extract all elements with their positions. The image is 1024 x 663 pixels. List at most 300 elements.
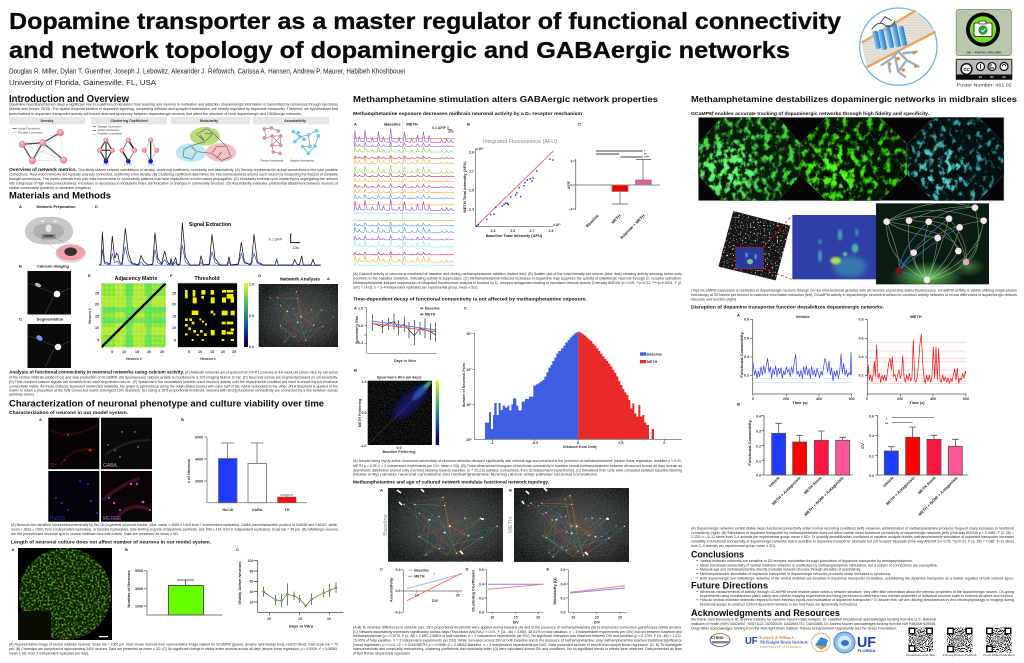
- panel E: adjacency matrix: Neuron #: [126, 357, 142, 361]
- panel C: assortativity lines: 20: [456, 594, 460, 598]
- panel: introduction and overview: [9, 94, 338, 190]
- panel C: delta F/F bar chart: -4: [569, 208, 572, 212]
- panel B: neuron number bar: 5000: [135, 569, 143, 573]
- caption: topology: (A,B) To minimize differences in network size, 15% proportional thresholds were applied during baseline (A) and in the presence of methamphetamine (B) to emphasize connection gains/losses (white arrows).: [353, 626, 682, 630]
- caption: topology: of best fit from simple linear regression.: [353, 652, 411, 656]
- clustering coefficient diagrams: C = 1/3: [124, 164, 133, 166]
- caption: decay: [353, 459, 682, 477]
- heading: middle column: Methamphetamine stimulation alters GABAergic network properties: [353, 94, 658, 104]
- caption: topology: methamphetamine (p = 0.1078, F (1, 46) = 2.690, 2.568% of total variation, n = 3 independent experiments per DIV). No significant interaction was observed between DIV and condition (p = 0.1750, F (11, 46) = 1.472,: [353, 634, 682, 638]
- panel B: CV bars: METH + NOMI + Antagonists: [917, 475, 959, 517]
- panel C: delta F/F bar chart: *: [644, 150, 646, 154]
- caption: GCaMP6f: microscopy at 30 frames per second to maximize information extraction (left). GCaMP6f activity in dopaminergic neurons is utilized to construct activity networks to reveal differences in dopaminergic network: [691, 293, 1017, 297]
- logo: CTRND: [710, 633, 730, 646]
- caption: topology: 15.45% of total variation, n = 3 independent experiments per DIV). While increases across DIV at both baseline and in the presence of methamphetamine, only methamphetamine reached statistical significance: [353, 638, 682, 642]
- panel B: neuron number bar: [125, 547, 222, 615]
- panel A: immunostaining images: TH: [50, 463, 57, 469]
- panel C: delta F/F bar chart: Baseline: [585, 213, 600, 228]
- panel A: METH connectivity trace: 0.6: [858, 336, 864, 340]
- badge: OK photo record: [956, 10, 1011, 56]
- acknowledgments text: Doug Miller acknowledges funding from the McKnight Brain Institute Trainee Enhancement Opportunity and the Gress Foundation.: [691, 626, 897, 630]
- caption: culture length: µm. (B) Coverslips are comprised of approximately 3400 neurons. Data are presented as mean ± SD. (C) No significant change in visibly active neurons across all days (simple linear regression, p = 0.0916, r² = 0.08365,: [9, 647, 338, 651]
- panel B: neuron number bar: 1000: [135, 604, 143, 608]
- panel C: distance from unity histogram: Baseline: [647, 352, 662, 356]
- colorbar: [244, 282, 254, 349]
- overview text block: connections. Real-world networks are typically sparsely connected, conferring a low density. (B) Clustering coefficient determines the interconnectedness around each neuron by measuring the fraction of complete: [9, 172, 338, 176]
- panel A: vehicle connectivity trace: 0: [752, 397, 754, 401]
- panel C: assortativity lines: Assortativity: [388, 577, 394, 602]
- methods caption: connectivity matrix. As these matrices represent undirected networks, the graph is symmetrical along the origin (black boxes) with each half of the matrix redundant to the other. (F) A threshold is applied to the: [9, 384, 338, 388]
- panel E: modularity lines: 0.2: [560, 596, 566, 600]
- panel C: assortativity lines: [380, 566, 462, 614]
- panel B: CV bars: 0.6: [869, 414, 874, 418]
- panel B: integrated fluorescence scatter: B: [467, 122, 470, 126]
- panel B: integrated fluorescence scatter: 2.9: [548, 229, 554, 233]
- panel F: threshold matrix: 10: [198, 350, 202, 354]
- panel D: clustering coefficient lines: 15: [514, 616, 518, 620]
- panel B: integrated fluorescence scatter: Baseline Total Intensity (AFU): [486, 233, 543, 238]
- heading: acknowledgments: Acknowledgments and Resources: [691, 607, 840, 618]
- panel A: METH connectivity trace: 200: [897, 397, 903, 401]
- panel E: adjacency matrix: 5: [111, 350, 113, 354]
- panel C: assortativity lines: C: [380, 566, 383, 572]
- panel F: threshold matrix: 5: [188, 350, 190, 354]
- panel D: clustering coefficient lines: 0.2: [479, 596, 484, 600]
- methods caption: matrix to retain a proportion of the fully connected matrix (strongest 15% depicted). (G) Using a 15% proportional threshold, neurons with strong functional connectivity are connected by a line between somas: [9, 389, 338, 393]
- panel G: network analysis image: G: [258, 273, 261, 278]
- panel C: active neurons line chart: 20: [327, 617, 331, 621]
- subheading: culture length: Length of neuronal culture does not affect number of neurons in our model system.: [11, 540, 211, 544]
- panel A: vehicle connectivity trace: 0.6: [744, 336, 749, 340]
- panel C: distance from unity histogram: 0.5: [618, 441, 624, 445]
- panel B: CV bars: *: [886, 416, 888, 422]
- caption: disruption: (A) Dopaminergic networks exhibit stable mean functional connectivity under normal recording conditions (left). However, administration of methamphetamine produces frequent sharp increases in functional: [691, 526, 1014, 530]
- panel B: CV bars: METH + Antagonists: [885, 475, 916, 506]
- methods caption: (arbitrary colors).: [9, 392, 35, 396]
- logo: CTRND: CTRND: [711, 636, 724, 640]
- badge: creative commons license: NC: [990, 75, 994, 79]
- assortativity diagram: Negative Assortativity: [290, 160, 315, 162]
- heading: right column: Methamphetamine destabilizes dopaminergic networks in midbrain slices: [691, 94, 1017, 104]
- panel B: functional connectivity bars: METH Alone: [803, 475, 823, 495]
- cropped imaging field: [718, 211, 792, 280]
- panel E: adjacency matrix: 20: [95, 302, 99, 306]
- methods caption: [9, 370, 338, 396]
- conclusions bullet list: Ventral midbrain networks are sensitive to D2 receptor modulation through stimulation of dopamine transporter by methamphetamine.: [700, 559, 913, 563]
- clustering coefficient diagrams: [93, 124, 159, 166]
- panel D: clustering coefficient lines: 20: [536, 616, 540, 620]
- panel C: assortativity lines: 0.3: [396, 568, 400, 572]
- heading: future directions: Future Directions: [691, 580, 768, 590]
- density diagram: Possible Connection: [18, 130, 43, 134]
- future directions bullet list: behavioral assays to construct context-dependent networks to see how these are dynamically restructured.: [700, 602, 858, 606]
- panel C: distance from unity histogram: 10¹: [466, 403, 472, 407]
- panel D: clustering coefficient lines: Clustering Coefficient: [470, 570, 476, 612]
- panel B: CV bars: 0.0: [869, 474, 874, 478]
- panel C: active neurons line chart: 15: [298, 617, 302, 621]
- panel D: clustering coefficient lines: D: [466, 566, 468, 572]
- panel C: active neurons line chart: Days in Vitro: [289, 624, 314, 628]
- panel A: culture coverslip image: A: [12, 547, 14, 552]
- panel B: CV bars: 0.2: [869, 454, 874, 458]
- panel B: spearman heatmap: 0.0: [396, 446, 402, 450]
- panel: acknowledgments and resources: [691, 607, 1015, 657]
- panel B: neuron number bar: Number of Neurons: [126, 570, 131, 608]
- panel E: modularity lines: 15: [595, 616, 599, 620]
- panel F: threshold matrix: Neuron #: [200, 357, 216, 361]
- panel A: calcium traces: Baseline: [384, 122, 402, 126]
- panel C: active neurons line chart: 40: [250, 590, 254, 594]
- panel B: neuron count bar chart: B: [181, 417, 184, 422]
- caption: culture length: (A) Representative image of ventral midbrain neurons. Scale bar = 1000 µm. Inset shows neurons from representative image stained for GCaMP6f (green), tyrosine hydroxylase (red), HuC/D (blue); inset scale bar = 75: [9, 642, 338, 646]
- panel B: CV bars: **: [885, 421, 888, 426]
- clustering coefficient diagrams: Possible Connection: [98, 132, 123, 136]
- panel B: METH network image: [508, 488, 629, 562]
- caption: D2 mechanism: (red line) to the baseline condition, indicating activity is suppressed. (C) Methamphetamine-induced increases in dopamine may suppress the activity of GABAergic neurons through D₂ receptor activation.: [353, 276, 682, 280]
- conclusions bullet list: Network age and methamphetamine directly modulate network structure through alteration of assortativity.: [700, 568, 861, 572]
- panel C: distance from unity histogram: METH: [647, 360, 658, 364]
- panel C: distance from unity histogram: [462, 306, 682, 449]
- caption: disruption: 2.325; n = 5–11 slices from 2–4 animals per experimental group; mean ± SD). To quantify destabilization, coefficient of variation analysis reveals methamphetamine stimulation of dopamine transporter increases: [691, 535, 1014, 539]
- logo: UF McKnight Brain Institute: Evelyn F. & William L.: [760, 636, 796, 640]
- caption: neuron types: [11, 523, 338, 536]
- panel B: neuron number bar: B: [125, 547, 128, 552]
- acknowledgments text: [691, 618, 936, 630]
- panel G: network analysis image: [258, 273, 338, 347]
- panel B: functional connectivity bars: 0.0: [756, 474, 761, 478]
- panel B: integrated fluorescence scatter: 2.7: [530, 229, 534, 233]
- caption: D2 mechanism: 307) = 14.03; n = 3–4 independent replicates per experimental group; mean ± SD).: [353, 286, 478, 290]
- panel B: neuron count bar chart: HuC/D: [223, 508, 234, 512]
- panel B: integrated fluorescence scatter: 2.7: [469, 170, 474, 174]
- subheading: GCaMP6f: GCaMP6f enables accurate tracking of dopaminergic networks through high fidelity and specificity.: [691, 111, 929, 116]
- overview text block: This study utilizes network calculations of density, clustering coefficient, modularity and assortativity. (A) Density represents the actual connections to the total possible: [78, 168, 338, 172]
- logo: UF McKnight Brain Institute: McKnight Brain Institute: [760, 640, 808, 644]
- heading: conclusions: Conclusions: [691, 548, 744, 560]
- colorbar: 0.0: [249, 345, 254, 349]
- panel A: METH connectivity trace: [858, 314, 969, 405]
- intro text: (Beeler and Dreyer, 2019). The spatial temporal kinetics of dopamine signaling, comprising diffusion and synaptic transmission, are heavily regulated by dopamine transporter. Therefore, we hypothesized that: [9, 107, 338, 111]
- methods caption: (A) Midbrain networks are prepared from P0-P1 (culture) or 4-6 week old (slice) mice by extraction: [185, 371, 338, 375]
- badge: creative commons license: [956, 59, 1012, 79]
- panel B: integrated fluorescence scatter: 2.3: [469, 208, 474, 212]
- panel C: assortativity lines: Baseline: [414, 568, 429, 572]
- panel A: METH connectivity trace: 0: [866, 397, 868, 401]
- panel C: active neurons line chart: Visibly Active Neurons: [237, 561, 242, 605]
- caption: topology: interconnectivity and community restructuring, clustering coefficients and modularity index (Q) were calculated across DIV and conditions, but no significant trends or effects were observed. Data presented as lines: [353, 647, 682, 651]
- panel E: modularity lines: [546, 566, 627, 624]
- future directions bullet list: How do ventral midbrain networks respond to both extrinsic inputs and modulation of dopamine transporter? To answer this, we are utilizing simultaneous in vivo electrophysiology or imaging during: [700, 598, 1014, 602]
- panel C: delta F/F bar chart: ΔF/F: [567, 180, 571, 189]
- panel B: spearman heatmap: [354, 368, 439, 454]
- panel B: neuron count bar chart: 6000: [195, 436, 203, 440]
- panel A: METH connectivity trace: Time (s): [909, 400, 925, 405]
- panel B: CV bars: [860, 414, 968, 517]
- panel B: neuron count bar chart: [181, 417, 307, 512]
- panel C: active neurons line chart: 100: [248, 559, 254, 563]
- functional network graph: [876, 203, 989, 292]
- metric header bars: Density: [41, 119, 53, 123]
- panel A: spearman decay line chart: Days in Vitro: [394, 359, 417, 363]
- panel C: distance from unity histogram: -0.5: [532, 441, 538, 445]
- density diagram: [13, 126, 67, 164]
- panel B: spearman heatmap: Baseline Preferring: [383, 450, 415, 454]
- caption: decay: METH p < 0.05, n = 3 independent experiments per DIV; mean ± SD). (B) Three-dimensional histogram of functional connectivity in baseline versus methamphetamine between all neurons across all days reveals an: [353, 464, 682, 468]
- panel F: threshold matrix: 20: [221, 350, 225, 354]
- panel C: delta F/F bar chart: **: [644, 152, 647, 156]
- assortativity diagram: [261, 126, 320, 162]
- panel B: neuron count bar chart: GABA: [252, 508, 263, 512]
- panel A: spearman decay line chart: Baseline: [425, 306, 440, 310]
- panel C: assortativity lines: -0.3: [394, 610, 400, 614]
- panel A: immunostaining images: A: [39, 417, 42, 422]
- subheading: topology: Methamphetamine and age of cultured network modulate functional network topology.: [353, 480, 549, 485]
- panel E: modularity lines: E: [546, 566, 550, 572]
- future directions bullet list: [696, 590, 1014, 606]
- panel A: vehicle connectivity trace: A: [737, 312, 740, 318]
- panel B: functional connectivity bars: B: [737, 402, 740, 406]
- blue calcium image: [792, 215, 876, 279]
- panel B: integrated fluorescence scatter: Integrated Fluorescence (AFU): [483, 139, 557, 145]
- panel D: signal extraction traces: 10s: [292, 246, 299, 250]
- panel A: immunostaining images: HuC/D: [50, 516, 65, 522]
- conclusions bullet list: [696, 559, 1014, 580]
- logo: UF McKnight Brain Institute: UNIVERSITY of FLORIDA: [760, 645, 802, 649]
- caption: neuron types: (A) Neurons are identified immunohistochemically by HuC/D (a general neuronal marker -blue, mean = 4085 ± 1419 from 7 independent replicates), GABA (neurotransmitter product of GAD65 and GAD67 -white,: [11, 523, 338, 527]
- panel A: spearman decay line chart: Spearman's Rho: [355, 315, 359, 344]
- clustering coefficient diagrams: C = 0: [148, 164, 155, 166]
- panel B: neuron count bar chart: # of Neurons: [186, 458, 191, 483]
- panel A: METH connectivity trace: METH: [910, 314, 922, 319]
- caption: culture length: mean ± SD, from 3 independent replicates per day).: [9, 652, 89, 656]
- panel B: functional connectivity bars: 0.1: [756, 460, 761, 464]
- panel C: distance from unity histogram: C: [464, 306, 467, 310]
- panel A: vehicle connectivity trace: 400: [816, 397, 822, 401]
- panel B: spearman heatmap: 1.0: [362, 380, 366, 384]
- panel B: spearman heatmap: B: [354, 368, 357, 372]
- panel B: METH network image: METH: [508, 517, 514, 533]
- panel B: functional connectivity bars: 0.4: [756, 414, 761, 418]
- panel A: baseline network image: A: [380, 488, 383, 492]
- panel B: calcium imaging: B: [19, 264, 22, 268]
- panel E: modularity lines: 0.0: [560, 610, 566, 614]
- intro text: Dopamine neurotransmission plays a significant role in a plethora of behaviors from learning and memory to motivation and addiction. Dopaminergic information is transmitted by consensus through synchrony: [9, 102, 338, 106]
- panel F: threshold matrix: 15: [172, 314, 176, 318]
- panel B: neuron count bar chart: 4000: [195, 458, 203, 462]
- metric header bars: Modularity: [200, 119, 218, 123]
- panel C: distance from unity histogram: Number of Neuronal Pairs: [462, 363, 466, 407]
- clustering coefficient diagrams: Actual Connection: [98, 128, 120, 132]
- panel C: active neurons line chart: [236, 547, 343, 628]
- panel C: delta F/F bar chart: Sulpiride + METH: [619, 213, 646, 240]
- panel A: spearman decay line chart: A: [354, 306, 357, 310]
- badge: creative commons license: SA: [1002, 75, 1006, 79]
- panel: materials and methods: [9, 190, 338, 396]
- panel B: functional connectivity bars: METH + NOMI + Antagonists: [803, 475, 845, 517]
- subheading: disruption: Disruption of dopamine transporter function destabilizes dopaminergic networks.: [691, 305, 884, 310]
- panel D: signal extraction traces: [95, 204, 321, 265]
- methods caption: Analysis of functional connectivity in neuronal networks using calcium activity.: [9, 370, 184, 375]
- caption: D2 mechanism: (A) Calcium activity of neurons is monitored at baseline and during methamphetamine addition (dotted line). (B) Scatter plot of the total intensity per neuron (blue dots) showing activity skewing below unity: [353, 272, 682, 276]
- badge: OK photo record: OK – PHOTO / RECORD: [966, 50, 1002, 54]
- panel A: vehicle connectivity trace: Vehicle: [796, 314, 810, 319]
- caption: culture length: [9, 642, 338, 656]
- panel D: clustering coefficient lines: 0.4: [479, 582, 484, 586]
- panel A: spearman decay line chart: 0.8: [358, 324, 363, 328]
- caption: decay: asymmetric distribution around unity (red line) skewing towards baseline. (n = 20,216 pairwise connections, from 33 independent experiments). (C) Deviations from unity were compared between baseline-favoring: [353, 468, 682, 472]
- panel E: adjacency matrix: 5: [97, 338, 99, 342]
- panel C: distance from unity histogram: 0: [577, 441, 579, 445]
- panel E: modularity lines: 10: [571, 616, 575, 620]
- panel A: METH connectivity trace: 600: [963, 397, 969, 401]
- panel A: network preparation: Network Preparation: [36, 204, 76, 209]
- overview text block: Overview of network metrics.: [9, 167, 77, 172]
- panel B: METH network image: B: [509, 488, 512, 492]
- panel C: distance from unity histogram: Distance from Unity: [563, 445, 597, 449]
- panel E: adjacency matrix: 10: [95, 326, 99, 330]
- panel C: active neurons line chart: 60: [250, 580, 254, 584]
- panel B: CV bars: 0.4: [869, 434, 874, 438]
- conclusions bullet list: Methamphetamine stimulation of dopamine transporter in dopaminergic networks produces sharp increases in synchrony.: [700, 572, 891, 576]
- panel B: functional connectivity bars: Vehicle: [767, 475, 781, 488]
- overview text block: [9, 167, 338, 190]
- subheading: D2 mechanism: Methamphetamine exposure decreases midbrain neuronal activity by a D₂ receptor mechanism: [353, 111, 582, 116]
- panel D: clustering coefficient lines: 10: [490, 616, 494, 620]
- panel B: integrated fluorescence scatter: 2.5: [469, 188, 474, 192]
- panel A: immunostaining images: GABA: [103, 463, 118, 469]
- panel E: modularity lines: Modularity (Q): [552, 577, 557, 605]
- authors and affiliation: [9, 66, 405, 87]
- panel C: segmentation: Segmentation: [37, 316, 64, 322]
- panel E: modularity lines: DIV: [594, 620, 601, 624]
- panel G: network analysis image: Network Analysis: [280, 276, 320, 282]
- panel A: spearman decay line chart: 1.0: [358, 306, 363, 310]
- panel E: adjacency matrix: Adjacency Matrix: [115, 276, 157, 282]
- acknowledgments text: Institutes of Health (NIH) DA026947, NS071122, DO020026, DA026947S1, DA043895. Dr. Andrew Maurer acknowledges funding from the NIH RM01MH109548.: [691, 622, 936, 626]
- panel C: delta F/F bar chart: METH: [610, 213, 622, 225]
- QR code: protocol: Primary Culture Protocol: [943, 653, 977, 657]
- panel A: METH connectivity trace: 0.8: [858, 318, 864, 322]
- panel F: threshold matrix: 15: [210, 350, 214, 354]
- panel A: calcium traces: [353, 122, 454, 266]
- subheading: time dependent decay: Time-dependent decay of functional connectivity is not affected by methamphetamine exposure.: [353, 296, 587, 302]
- panel B: spearman heatmap: -1.0: [360, 444, 366, 448]
- panel A: spearman decay line chart: METH: [425, 312, 436, 316]
- panel B: spearman heatmap: 0.0: [362, 411, 366, 415]
- panel B: functional connectivity bars: [737, 402, 853, 517]
- panel E: modularity lines: 0.6: [560, 568, 566, 572]
- metric header bars: Clustering Coefficient: [110, 119, 148, 123]
- panel B: integrated fluorescence scatter: METH Total Intensity (AFU): [462, 161, 467, 213]
- panel F: threshold matrix: F: [170, 273, 173, 278]
- future directions bullet list: Whereas measurements of activity through GCaMP6f reveal relative place within a network structure, they offer little information about the intrinsic properties of the dopaminergic neuron. On-going: [700, 590, 1014, 594]
- panel B: integrated fluorescence scatter: 2.3: [490, 229, 496, 233]
- panel D: signal extraction traces: D: [95, 204, 98, 209]
- modularity diagram: [176, 127, 236, 162]
- logo: UF McKnight Brain Institute: [745, 636, 808, 649]
- panel B: CV bars: CV: [860, 443, 865, 449]
- panel C: segmentation: [19, 316, 71, 368]
- panel B: integrated fluorescence scatter: 2.5: [510, 229, 515, 233]
- panel C: distance from unity histogram: 10⁰: [466, 437, 472, 442]
- acknowledgments text: We thank Jack Kennedy & Dr. Andrew Zalesky for valuable input in data analysis. Dr. Habibeh Khoshbouei acknowledges funding from the U.S. National: [691, 618, 936, 622]
- badge: creative commons license: cc: [964, 67, 970, 73]
- heading: characterization: Characterization of neuronal phenotype and culture viability over time: [9, 398, 324, 410]
- panel B: functional connectivity bars: Functional Connectivity: [747, 420, 752, 466]
- panel B: CV bars: METH Alone: [917, 475, 937, 495]
- panel C: active neurons line chart: 80: [250, 570, 254, 574]
- panel A: vehicle connectivity trace: Time (s): [792, 400, 808, 405]
- panel B: neuron number bar: 3000: [135, 587, 143, 591]
- caption: D2 mechanism: [353, 272, 682, 290]
- panel A: vehicle connectivity trace: 200: [783, 397, 789, 401]
- panel D: signal extraction traces: Signal Extraction: [189, 222, 231, 228]
- panel C: assortativity lines: 10: [415, 594, 419, 598]
- panel E: adjacency matrix: E: [88, 273, 91, 278]
- panel: characterization: [9, 398, 343, 656]
- logo: UF McKnight Brain Institute: UF: [745, 636, 758, 647]
- panel B: integrated fluorescence scatter: ×10⁵: [476, 147, 484, 151]
- assortativity diagram: Positive Assortativity: [261, 160, 284, 162]
- panel A: calcium traces: A: [354, 122, 357, 126]
- metric header bars: [9, 117, 329, 124]
- panel C: delta F/F bar chart: 0: [570, 184, 572, 188]
- caption: decay: (below unity) pairwise neuronal correlations and methamphetamine-favoring (above unity) pairwise neuronal correlations.: [353, 473, 598, 477]
- overview text block: similar connectivity (positive) or dissimilar (negative).: [9, 186, 92, 190]
- panel F: threshold matrix: 20: [172, 302, 176, 306]
- panel E: adjacency matrix: 25: [95, 292, 99, 296]
- panel B: neuron count bar chart: TH: [285, 508, 290, 512]
- authors and affiliation: Douglas R. Miller, Dylan T. Guenther, Joseph J. Lebowitz, Alexander J. Refowich, Carissa A. Hansen, Andrew P. Maurer, Habibeh Khoshbouei: [9, 66, 405, 76]
- panel A: calcium traces: 0.1 ΔF/F: [432, 126, 447, 130]
- panel A: METH connectivity trace: 400: [930, 397, 936, 401]
- panel F: threshold matrix: 25: [172, 292, 176, 296]
- panel C: active neurons line chart: 10: [267, 617, 271, 621]
- panel B: functional connectivity bars: 0.3: [756, 430, 761, 434]
- methods caption: (D) Time-resolved calcium signals are extracted from each segmented neuron. (E) Spearman's rho correlations between each neuron's activity over the experimental condition are used to create the full functional: [9, 380, 338, 384]
- conclusions bullet list: Both dopaminergic and GABAergic networks of the ventral midbrain are sensitive to dopamine transporter modulation, establishing the dopamine transporter as a master regulator of both network types.: [700, 576, 1014, 580]
- panel B: integrated fluorescence scatter: ×10⁵: [553, 223, 561, 227]
- colorbar: 1.0: [249, 282, 254, 286]
- panel A: calcium traces: METH: [406, 122, 418, 126]
- panel: future directions: [691, 580, 1014, 606]
- panel A: baseline network image: [380, 488, 503, 562]
- panel C: delta F/F bar chart: 6: [570, 160, 572, 164]
- panel A: vehicle connectivity trace: Functional Connectivity: [739, 332, 744, 378]
- clustering coefficient diagrams: C = 1: [103, 164, 110, 166]
- panel C: delta F/F bar chart: [567, 122, 660, 240]
- panel C: distance from unity histogram: 1: [663, 441, 665, 445]
- panel F: threshold matrix: 5: [174, 338, 176, 342]
- caption: GCaMP6f: (Top) GCaMP6f expression is restricted to dopaminergic neurons through cre-lox intersectional genetics with all neurons expressing stable fluorescence. GCaMP6f activity is visible utilizing single-photon: [691, 288, 1017, 292]
- heading: materials and methods: Materials and Methods: [9, 190, 111, 200]
- panel A: vehicle connectivity trace: 0.4: [744, 355, 749, 359]
- caption: neuron types: mean = 3619 ± 1900, from 3 independent replicates), or tyrosine hydroxylase (rate-limiting enzyme of dopamine synthesis -red; 609 ± 134, from 6 independent replicates). Scale bar = 40 µm. (B) GABAergic neurons: [11, 528, 338, 532]
- panel C: assortativity lines: METH: [414, 574, 425, 578]
- panel A: vehicle connectivity trace: 0.8: [744, 318, 749, 322]
- caption: GCaMP6f: [691, 288, 1017, 301]
- panel A: spearman decay line chart: [354, 306, 440, 363]
- panel E: adjacency matrix: 10: [122, 350, 126, 354]
- caption: neuron types: are the predominant neuronal type in ventral midbrain neuronal culture. Data are presented as mean ± SD.: [11, 532, 179, 536]
- panel B: functional connectivity bars: 0.2: [756, 444, 761, 448]
- QR code: publication: [983, 628, 1015, 657]
- density diagram: Actual Connection: [18, 126, 40, 130]
- badge: creative commons license: BY: [979, 75, 983, 79]
- caption: disruption: [691, 526, 1014, 548]
- QR code: publication: PLoS ONE Publication: [983, 653, 1015, 657]
- panel B: CV bars: Vehicle: [881, 475, 895, 488]
